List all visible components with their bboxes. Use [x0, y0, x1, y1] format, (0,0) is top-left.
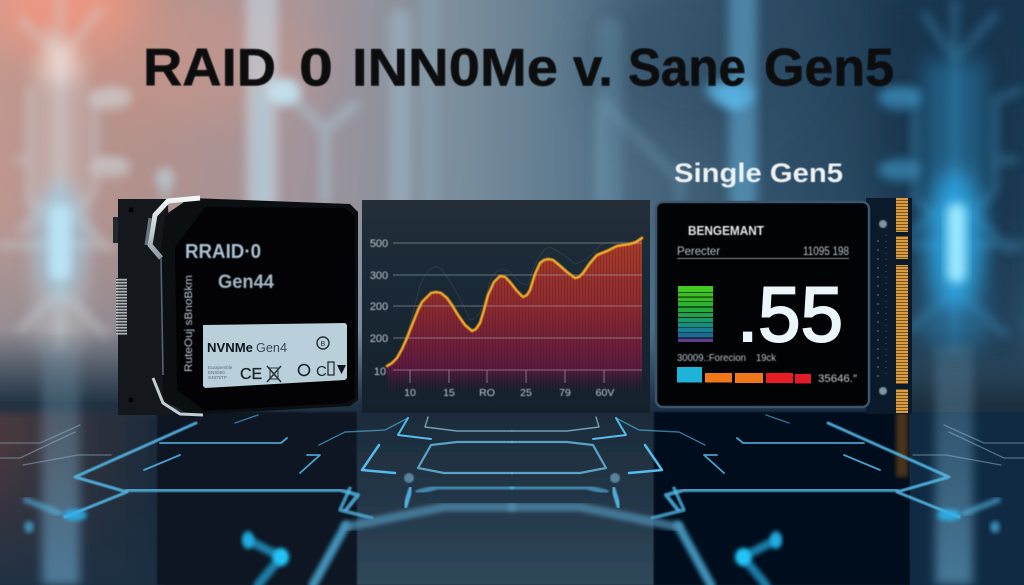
- text: metric caption: 30009.:Forecion: [677, 353, 746, 364]
- text: table header: [677, 246, 849, 258]
- text: table header: Perecter: [677, 246, 720, 258]
- text: table header: 11095 198: [803, 246, 849, 258]
- chart area fill: [387, 238, 642, 392]
- y axis labels: [370, 238, 388, 378]
- product sticker: NVNMe: [207, 340, 253, 355]
- panel: Single Gen5 SSD benchmark: [656, 198, 912, 414]
- data line: [387, 238, 642, 366]
- x axis labels: 79: [559, 387, 571, 399]
- big metric: .55: [737, 270, 843, 358]
- title: 0: [299, 38, 333, 98]
- x axis labels: 10: [404, 387, 416, 399]
- text: status value: 35646.″: [818, 373, 857, 385]
- y axis labels: 200: [370, 333, 388, 345]
- x axis labels: 15: [443, 387, 455, 399]
- product sticker: [203, 323, 347, 388]
- y axis labels: 10: [374, 366, 386, 378]
- mounting bracket: [113, 199, 172, 415]
- product sticker: Eurapemble: [208, 365, 233, 370]
- mirrored right half traces: [512, 415, 1024, 585]
- y axis labels: 200: [370, 301, 388, 313]
- y axis labels: 500: [370, 238, 388, 250]
- text: RAID-0: RRAID·0: [185, 241, 261, 263]
- title: [143, 38, 894, 98]
- title: Sane: [628, 38, 746, 98]
- product sticker: B: [320, 341, 326, 348]
- title: INN0Me: [352, 38, 558, 98]
- product sticker: ENS500: [208, 370, 225, 375]
- x axis labels: 60V: [596, 387, 614, 399]
- panel: RAID 0 Gen4 SSD: [113, 198, 358, 415]
- circuit board edge: [866, 198, 912, 414]
- title: v.: [573, 38, 613, 98]
- ghost line: [400, 242, 640, 355]
- segmented status bar: [677, 367, 811, 384]
- blurred circuit background: [0, 0, 1024, 420]
- stacked level meter: [678, 286, 713, 342]
- x axis labels: 25: [520, 387, 532, 399]
- text: metric caption: 19ck: [756, 353, 777, 364]
- left half traces: [0, 415, 512, 585]
- x axis labels: RO: [479, 387, 495, 399]
- screen: [656, 202, 869, 407]
- text: Gen44: Gen44: [218, 272, 274, 293]
- product sticker: C: [316, 363, 327, 380]
- panel: performance line chart: [362, 200, 650, 413]
- title: RAID: [143, 38, 276, 98]
- gridlines: [393, 243, 642, 383]
- product sticker: CE: [240, 366, 262, 383]
- silver rail: [146, 198, 203, 415]
- title: Gen5: [764, 38, 894, 98]
- y axis labels: 300: [370, 270, 388, 282]
- x axis labels: [404, 387, 614, 399]
- SSD body: [160, 198, 358, 415]
- circuit board floor: [0, 330, 1024, 585]
- product sticker: Gen4: [256, 340, 287, 355]
- SSD top surface: [175, 207, 355, 411]
- product sticker: S4875TP: [208, 375, 227, 380]
- heading: Single Gen5: Single Gen5: [674, 158, 843, 188]
- text: vertical side label: RuteOuj sBnoBkm: [183, 275, 195, 372]
- text: benchmark heading: BENGEMANT: [688, 224, 764, 238]
